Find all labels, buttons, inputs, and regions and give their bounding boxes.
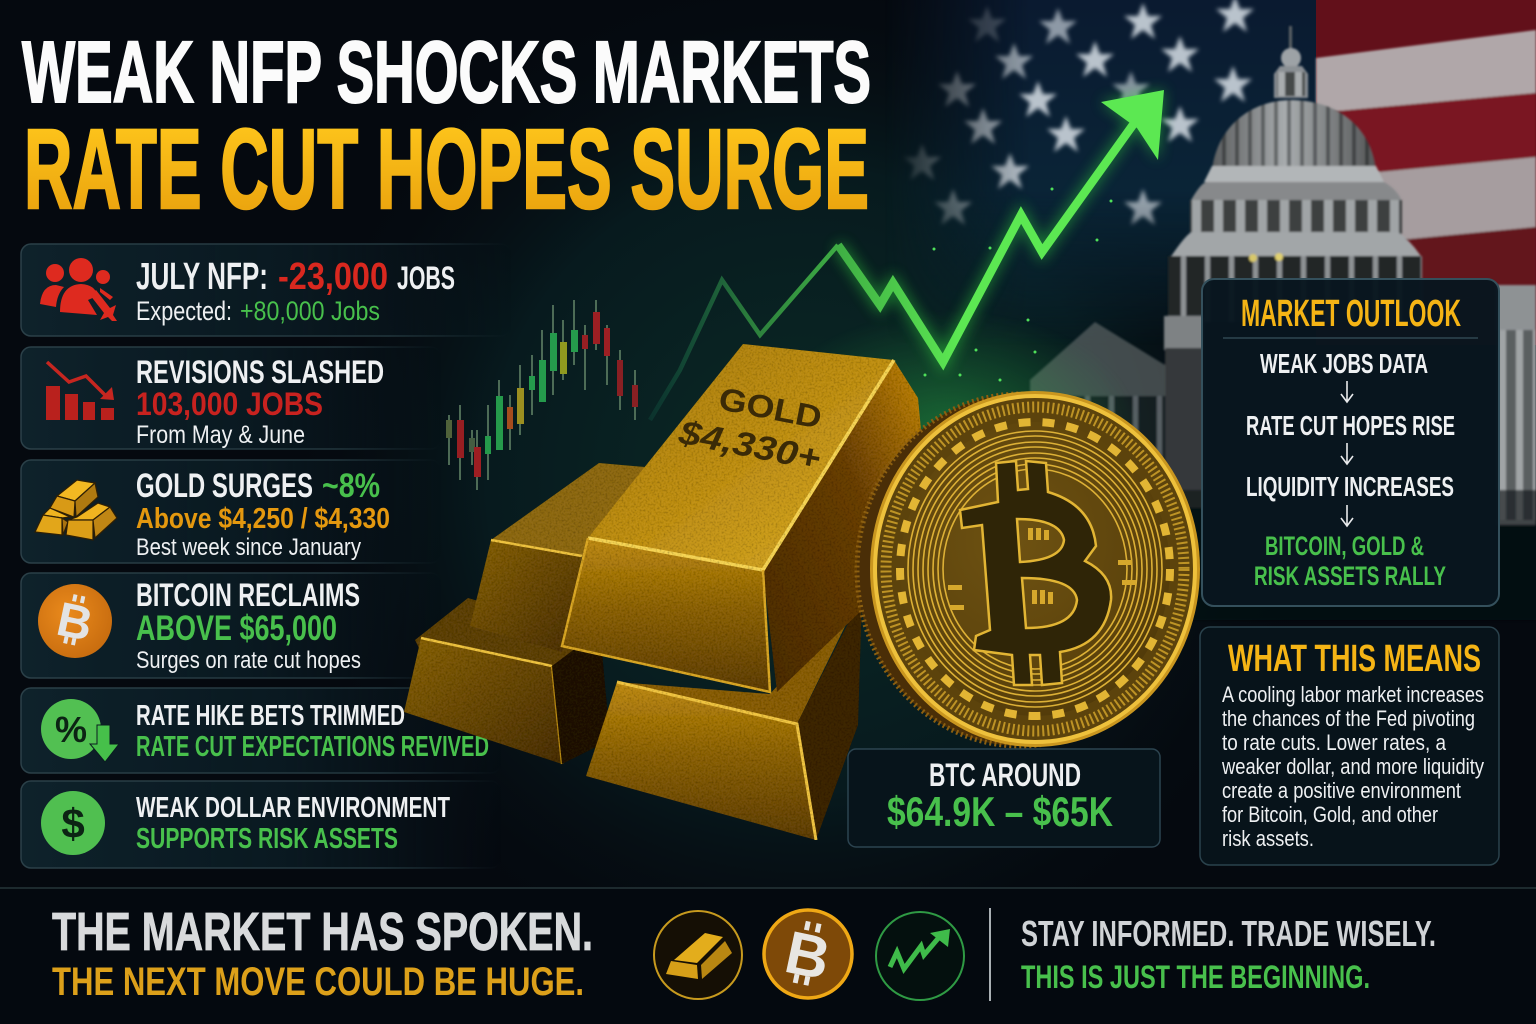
bottom headline [52, 902, 593, 1004]
icon: growth arrow circle [876, 912, 964, 1000]
panel: gold surges: GOLD SURGES [136, 467, 313, 505]
panel: weak dollar: SUPPORTS RISK ASSETS [136, 823, 398, 855]
icon: percent circle with arrow [41, 699, 119, 762]
panel: BTC around [848, 749, 1160, 847]
green rising arrow [650, 90, 1164, 420]
panel: market outlook: WEAK JOBS DATA [1260, 348, 1428, 379]
bottom right bar [586, 592, 862, 840]
panel: July NFP [21, 244, 511, 336]
icon: gold bar circle [654, 911, 742, 999]
icon: people with down arrow [40, 258, 117, 321]
candlestick chart [446, 300, 638, 490]
panel: weak dollar: WEAK DOLLAR ENVIRONMENT [136, 792, 450, 824]
icon: bitcoin orange [38, 584, 112, 658]
icon: bitcoin circle [764, 910, 852, 998]
bottom headline: THE NEXT MOVE COULD BE HUGE. [52, 960, 584, 1004]
icon: falling bar chart [46, 362, 114, 420]
capitol building [1030, 26, 1536, 620]
panel: BTC around: $64.9K – $65K [887, 788, 1113, 835]
gold bar engraving: $4,330+ [675, 413, 824, 478]
bottom right message [1021, 913, 1436, 995]
arrow [1341, 443, 1353, 464]
panel: market outlook [1202, 279, 1499, 606]
icon: bitcoin orange: B [52, 593, 97, 652]
body text: create a positive environment [1222, 778, 1461, 803]
panel: revisions slashed: REVISIONS SLASHED [136, 354, 384, 390]
panel: July NFP: JULY NFP: [136, 256, 268, 298]
panel: revisions slashed [21, 347, 441, 449]
panel: market outlook: BITCOIN, GOLD & [1265, 531, 1424, 561]
icon: percent circle with arrow: % [55, 709, 87, 750]
bottom bar [0, 888, 1536, 1024]
title: RATE CUT HOPES SURGE [24, 106, 869, 232]
panel: bitcoin reclaims [21, 573, 441, 678]
icon: big bitcoin symbol [960, 461, 1111, 685]
panel: what this means [1200, 627, 1499, 865]
bitcoin coin [857, 391, 1200, 747]
panel: revisions slashed: 103,000 JOBS [136, 386, 323, 422]
body text: for Bitcoin, Gold, and other [1222, 802, 1438, 827]
panel: revisions slashed: From May & June [136, 421, 305, 449]
bottom left bar [404, 598, 610, 764]
icon: dollar circle: $ [61, 800, 85, 847]
panel: bitcoin reclaims: ABOVE $65,000 [136, 609, 337, 648]
panel: gold surges: Best week since January [136, 534, 361, 561]
panel: rate hike bets: RATE HIKE BETS TRIMMED [136, 700, 405, 732]
icon: bitcoin circle: B [780, 918, 836, 993]
circuit chips [948, 528, 1136, 610]
panel: gold surges [21, 460, 441, 563]
gold bar engraving [675, 374, 831, 478]
gold bars [404, 344, 922, 840]
body text: the chances of the Fed pivoting [1222, 706, 1475, 731]
body text: A cooling labor market increases [1222, 682, 1484, 707]
panel: July NFP: +80,000 Jobs [240, 296, 380, 326]
title: WEAK NFP SHOCKS MARKETS [22, 24, 871, 121]
bottom headline: THE MARKET HAS SPOKEN. [52, 902, 593, 962]
panel: gold surges: Above $4,250 / $4,330 [136, 503, 390, 535]
panel: July NFP: JOBS [397, 260, 455, 296]
panel: July NFP: -23,000 [278, 256, 388, 298]
panel: rate hike bets [21, 688, 501, 773]
body text: to rate cuts. Lower rates, a [1222, 730, 1447, 755]
icon: dollar circle [41, 791, 105, 855]
body text: risk assets. [1222, 826, 1314, 851]
body text [1221, 682, 1484, 851]
panel: July NFP: Expected: [136, 296, 232, 326]
panel: rate hike bets: RATE CUT EXPECTATIONS REVIVED [136, 731, 489, 763]
icon: gold bars stack [35, 480, 117, 540]
panel: bitcoin reclaims: Surges on rate cut hopes [136, 647, 361, 674]
body text: weaker dollar, and more liquidity [1221, 754, 1484, 779]
arrow [1341, 381, 1353, 402]
title [22, 24, 871, 232]
bottom right message: THIS IS JUST THE BEGINNING. [1021, 959, 1370, 995]
panel: BTC around: BTC AROUND [929, 757, 1081, 793]
green glow behind coin [760, 310, 1140, 550]
panel: bitcoin reclaims: BITCOIN RECLAIMS [136, 577, 360, 613]
american flag backdrop [880, 0, 1536, 345]
back left bar [470, 463, 645, 652]
arrow [1341, 505, 1353, 526]
panel: weak dollar [21, 781, 501, 868]
panel: gold surges: ~8% [322, 467, 380, 505]
top bar [562, 344, 922, 692]
gold bar engraving: GOLD [716, 380, 825, 436]
panel: market outlook: RISK ASSETS RALLY [1254, 561, 1446, 591]
